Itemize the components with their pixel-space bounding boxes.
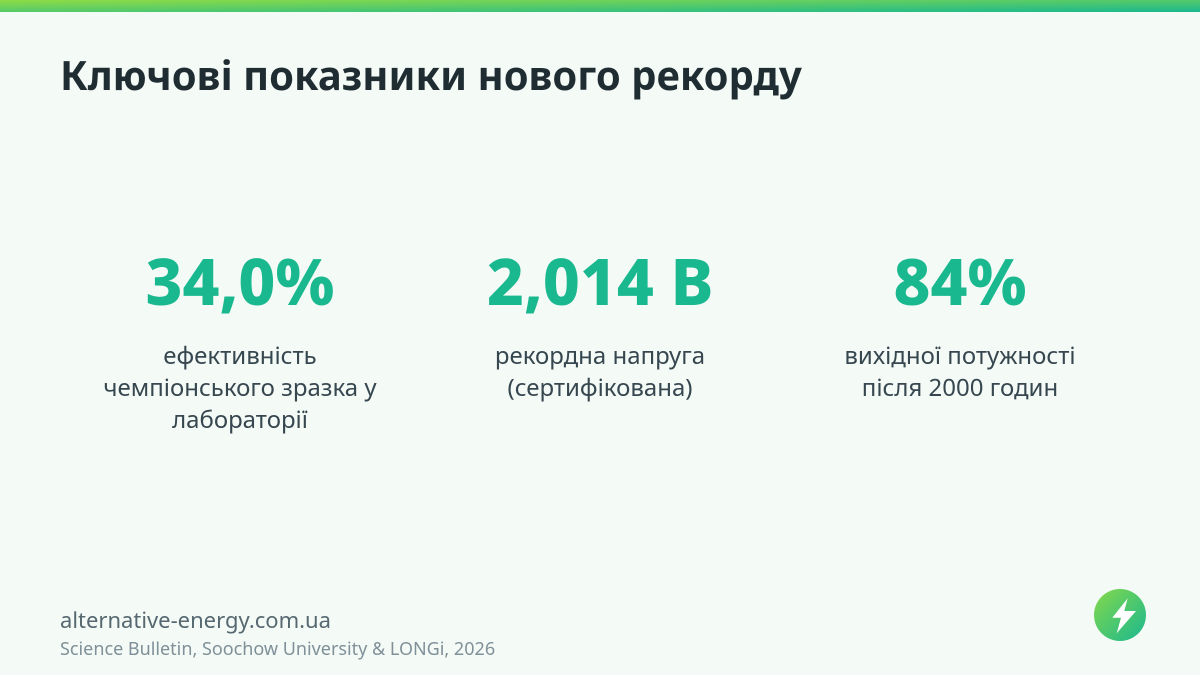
title: Ключові показники нового рекорду — [60, 47, 802, 102]
metric: efficiency — [103, 237, 377, 436]
metric: voltage — [487, 237, 713, 404]
metric: output power — [844, 237, 1076, 404]
label: output power — [844, 339, 1076, 404]
label: output power: вихідної потужності — [844, 339, 1076, 372]
label: output power: після 2000 годин — [862, 371, 1058, 404]
label: voltage: рекордна напруга — [495, 339, 705, 372]
label: efficiency: лабораторії — [172, 403, 308, 436]
label: voltage — [495, 339, 705, 404]
label: efficiency — [103, 339, 377, 436]
value: 34,0%: 34,0% — [146, 237, 334, 324]
value: 84%: 84% — [893, 237, 1027, 324]
source line: Science Bulletin, Soochow University & LONGi, 2026 — [60, 637, 495, 661]
label: efficiency: чемпіонського зразка у — [103, 371, 377, 404]
icon: lightning logo — [1094, 589, 1146, 641]
website: alternative-energy.com.ua — [60, 605, 331, 635]
top gradient bar — [0, 0, 1200, 12]
value: 2,014 V: 2,014 В — [487, 237, 713, 324]
label: efficiency: ефективність — [163, 339, 317, 372]
label: voltage: (сертифікована) — [508, 371, 692, 404]
